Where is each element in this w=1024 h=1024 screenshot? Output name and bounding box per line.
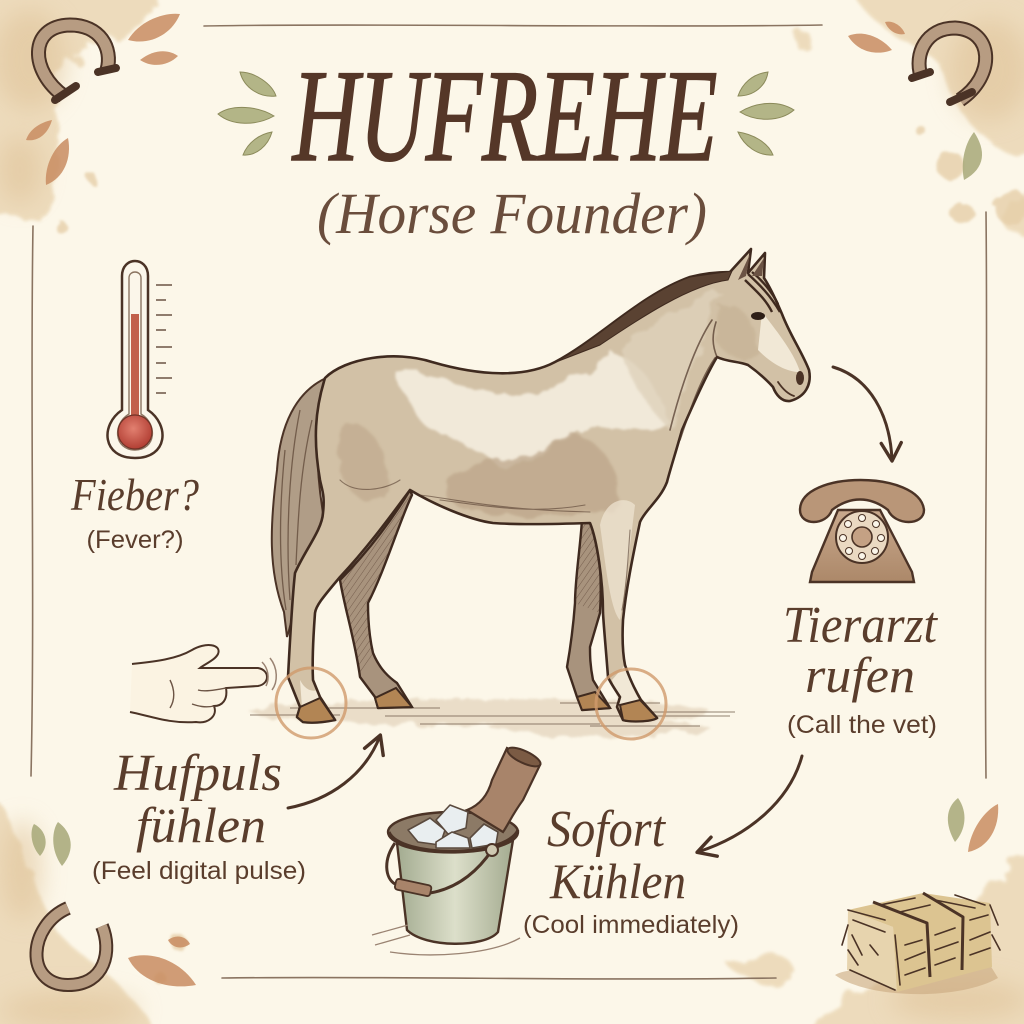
tail bbox=[272, 378, 326, 637]
illustration: horse bbox=[272, 249, 810, 723]
icon: horseshoe bottom left bbox=[36, 908, 106, 985]
hoof highlight circles bbox=[276, 668, 666, 739]
icon: thermometer bbox=[107, 261, 172, 458]
handle bbox=[387, 843, 492, 893]
icon: telephone bbox=[800, 480, 924, 582]
label: Hufpuls: (Feel digital pulse) bbox=[92, 857, 306, 885]
label: Tierarzt rufen: rufen bbox=[805, 647, 915, 703]
eye bbox=[751, 312, 765, 320]
bucket inner rim bbox=[388, 812, 518, 852]
arrow: to hoof bbox=[288, 736, 380, 808]
label: Sofort Kühlen: Kühlen bbox=[549, 853, 686, 909]
forelock bbox=[745, 272, 780, 312]
icon: horseshoe top right bbox=[912, 28, 986, 102]
nostril bbox=[796, 371, 804, 385]
far hind leg bbox=[340, 490, 412, 708]
label: Fieber bbox=[70, 469, 199, 554]
label: Tierarzt rufen: (Call the vet) bbox=[787, 711, 937, 739]
bale bands bbox=[873, 893, 963, 977]
label: Tierarzt rufen bbox=[783, 597, 938, 739]
bottle bbox=[467, 748, 540, 832]
ground hatch bbox=[372, 925, 520, 955]
body outline fill bbox=[288, 249, 810, 723]
icon: ice bucket bbox=[372, 744, 543, 955]
horse ground shadow bbox=[250, 699, 735, 736]
ice cubes bbox=[408, 805, 498, 848]
top and side bbox=[848, 893, 992, 992]
label: Fieber: (Fever?) bbox=[86, 526, 184, 554]
label: Hufpuls: fühlen bbox=[136, 797, 266, 853]
handle grip bbox=[394, 878, 432, 897]
mouth bbox=[778, 382, 794, 396]
label: Fieber: Fieber? bbox=[70, 469, 199, 520]
end face bbox=[847, 910, 897, 990]
jaw and neck lines bbox=[670, 320, 717, 440]
label: Sofort Kühlen: Sofort bbox=[547, 801, 666, 858]
title: HUFREHE bbox=[291, 42, 718, 189]
far front leg bbox=[567, 520, 610, 710]
label: Hufpuls: Hufpuls bbox=[113, 745, 282, 802]
shading lines bbox=[340, 480, 630, 610]
bucket body bbox=[397, 840, 513, 944]
icon: hay bale bbox=[835, 893, 1000, 994]
shadow bbox=[835, 965, 998, 994]
straw hatching bbox=[842, 895, 1000, 990]
arrow: phone to cool bbox=[698, 756, 802, 852]
bottle opening bbox=[505, 744, 543, 770]
handle lug bbox=[486, 844, 498, 856]
coat patches bbox=[300, 290, 800, 722]
label: Tierarzt rufen: Tierarzt bbox=[783, 597, 938, 654]
inner ear bbox=[738, 254, 764, 280]
bucket rim bbox=[389, 830, 518, 851]
label: Hufpuls bbox=[92, 745, 306, 885]
hooves bbox=[297, 688, 657, 723]
title ornaments: leaves bbox=[218, 72, 794, 155]
subtitle: (Horse Founder) bbox=[317, 181, 707, 246]
label: Sofort Kühlen bbox=[523, 801, 739, 939]
arrow: horse to phone bbox=[833, 367, 892, 460]
mane bbox=[556, 271, 732, 362]
icon: horseshoe top left bbox=[38, 25, 116, 100]
label: Sofort Kühlen: (Cool immediately) bbox=[523, 911, 739, 939]
icon: hand feeling pulse bbox=[130, 645, 276, 722]
body ink outline bbox=[288, 249, 810, 723]
